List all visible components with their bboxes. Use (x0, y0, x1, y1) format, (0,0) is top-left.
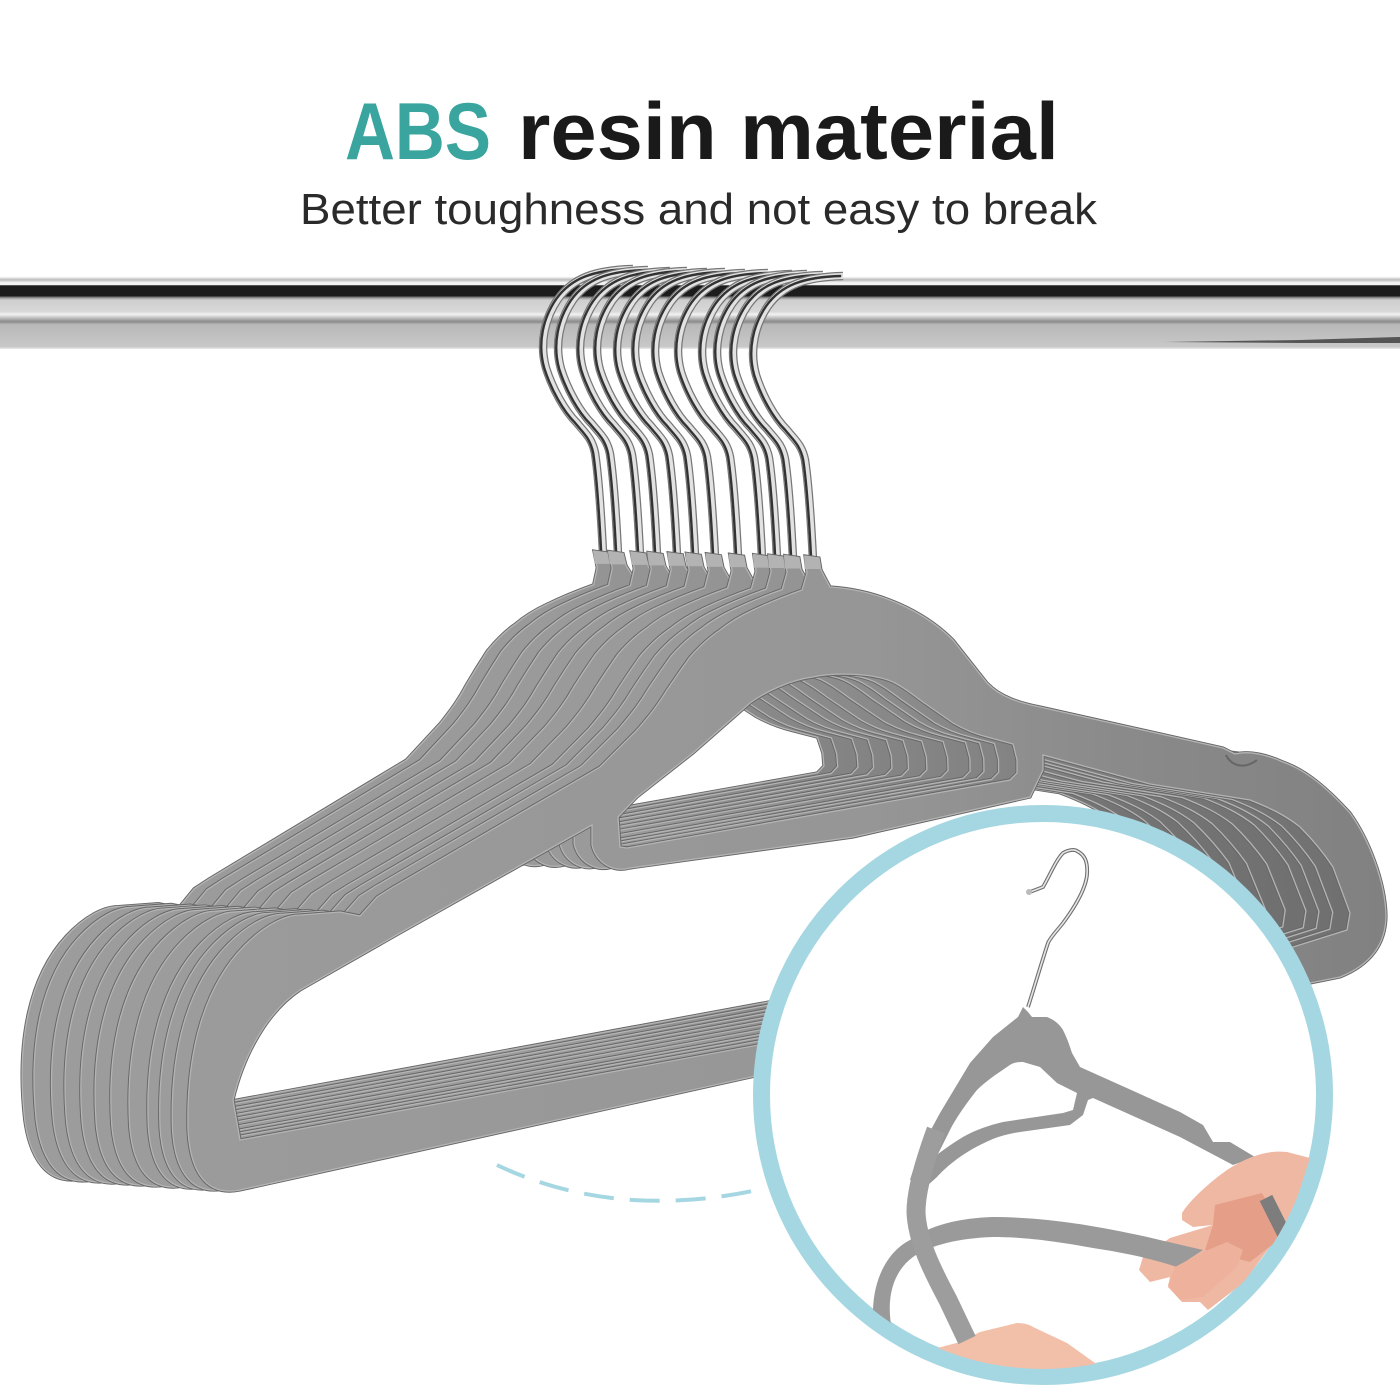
title: ABS (345, 87, 491, 177)
detail circle (762, 814, 1324, 1390)
hanger bottom bar (873, 1217, 1203, 1330)
finger over bar (1168, 1242, 1243, 1300)
hanger left arm (916, 1130, 967, 1340)
title remainder: resin material (518, 87, 1059, 177)
hand: lower (938, 1323, 1096, 1369)
dashed connector (497, 1165, 762, 1201)
small hook (1026, 850, 1087, 1007)
chrome rod (0, 277, 1400, 349)
hand: upper (1139, 1152, 1310, 1310)
hanger stack (0, 551, 1386, 1191)
hooks (541, 269, 843, 560)
small hanger body (910, 1007, 1255, 1185)
subtitle: Better toughness and not easy to break (300, 185, 1098, 234)
hanger end behind fingers (1266, 1198, 1284, 1234)
palm shadow (1205, 1193, 1285, 1262)
